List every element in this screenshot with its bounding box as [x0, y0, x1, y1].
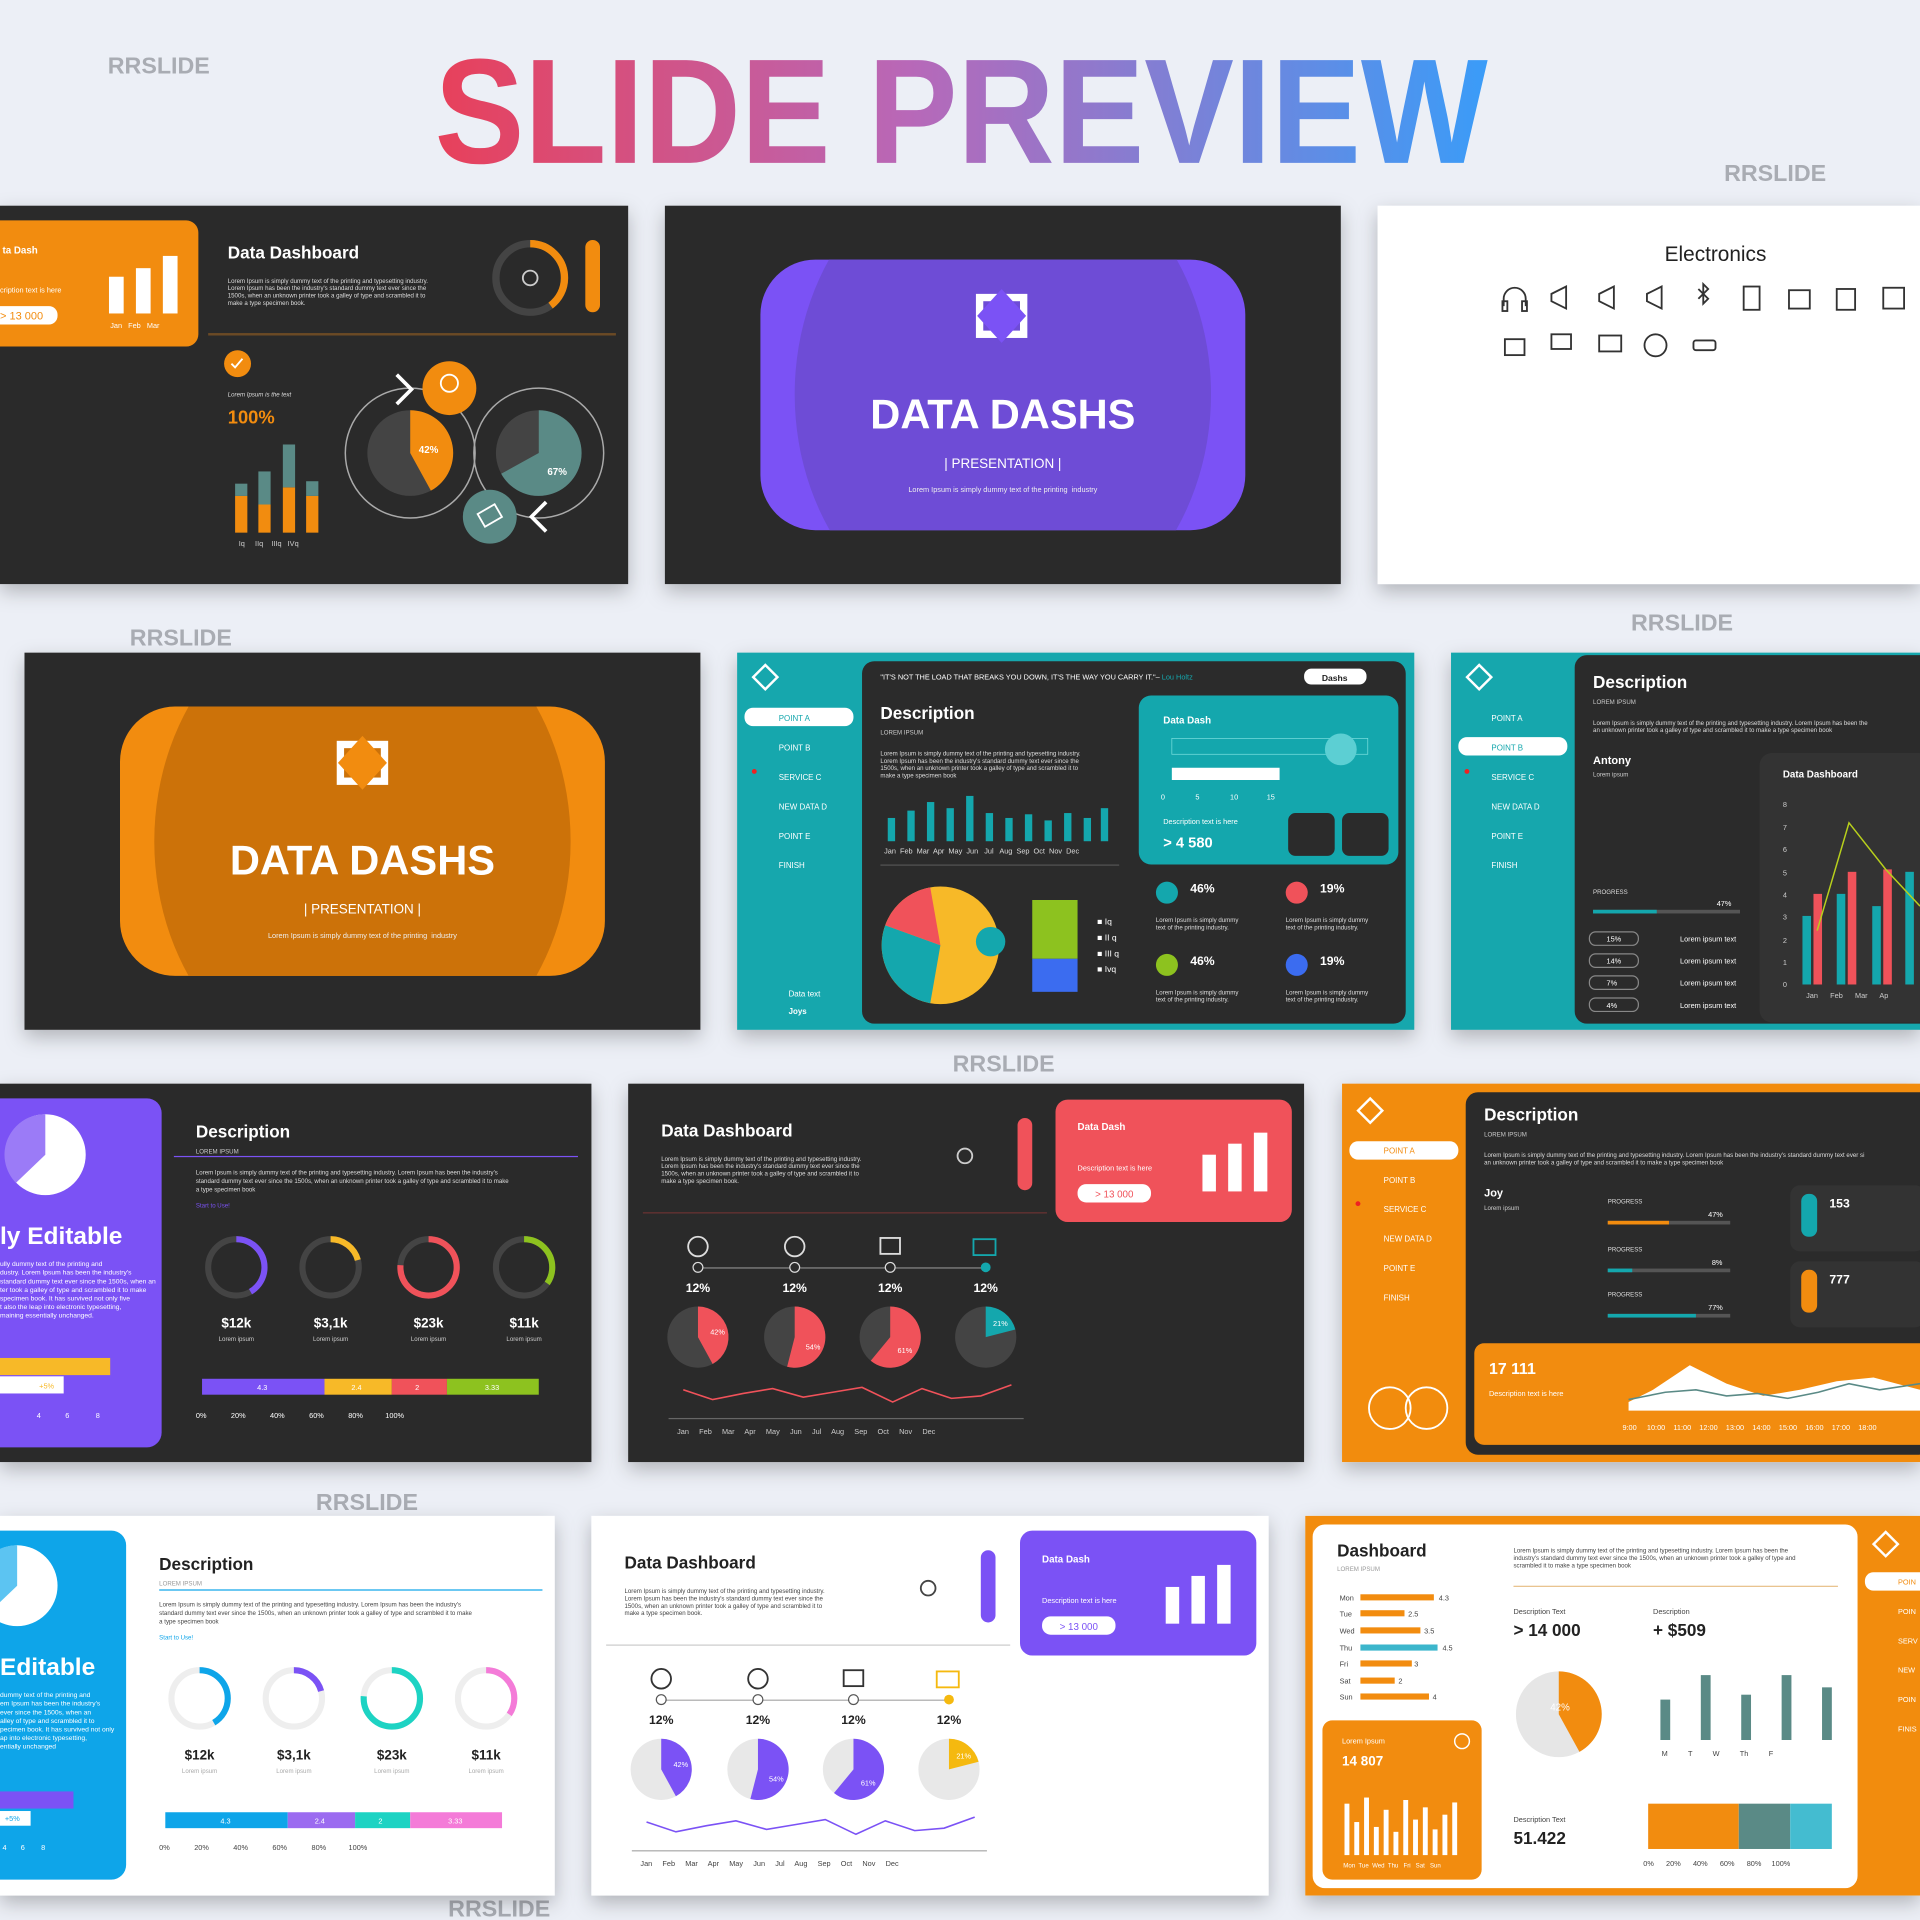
slide E: teal description dashboard: POINT B — [779, 744, 810, 753]
slide F: teal description chart: POINT A — [1491, 714, 1523, 723]
slide G: purple editable donuts: $3,1k — [314, 1315, 348, 1330]
slide H: data dashboard red: 12% — [973, 1281, 998, 1295]
slide H: data dashboard red: 12% — [686, 1281, 710, 1295]
slide G: purple editable donuts: 0% 20% 40% 60% 80% 100% — [196, 1411, 405, 1420]
slide E: teal description dashboard: Description text is here — [1163, 817, 1238, 826]
slide K: white data dashboard purple: 21% — [956, 1751, 971, 1760]
slide H: data dashboard red: 21% — [993, 1319, 1008, 1328]
slide A: data dashboard dark: Data Dashboard — [228, 242, 359, 262]
slide K: white data dashboard purple: Jan Feb Mar Apr May Jun Jul Aug Sep Oct Nov Dec — [640, 1859, 899, 1868]
slide F: teal description chart: 14% — [1607, 957, 1622, 966]
slide H: data dashboard red — [628, 1084, 1304, 1462]
slide I: orange description: 77% — [1708, 1303, 1723, 1312]
slide H: data dashboard red: 1500s, when an unknown printer took a galley of type and scrambled it to — [661, 1171, 859, 1178]
watermarks: RRSLIDE — [316, 1489, 418, 1515]
slide G: purple editable donuts: $23k — [414, 1315, 444, 1330]
slide G: purple editable donuts: dustry. Lorem Ipsum has been the industry's — [0, 1270, 132, 1277]
slide E: teal description dashboard: Lorem Ipsum is simply dummy text of the printing and typesetting industry. — [880, 751, 1081, 758]
slide F: teal description chart: 47% — [1717, 899, 1732, 908]
slide G: purple editable donuts: 4 6 8 — [37, 1411, 100, 1420]
slide L: orange dashboard: Thu — [1340, 1644, 1352, 1653]
slide C: electronics icons — [1378, 206, 1920, 584]
slide J: white blue editable: Description — [159, 1554, 253, 1574]
slide L: orange dashboard: > 14 000 — [1513, 1620, 1581, 1640]
slide H: data dashboard red: 12% — [782, 1281, 807, 1295]
slide B: purple title — [654, 202, 1352, 602]
slide F: teal description chart: 1 — [1783, 958, 1787, 967]
slide I: orange description: FINISH — [1384, 1293, 1410, 1302]
slide J: white blue editable: +5% — [5, 1814, 20, 1823]
slide G: purple editable donuts: LOREM IPSUM — [196, 1148, 239, 1155]
slide L: orange dashboard: 14 807 — [1342, 1754, 1383, 1769]
slide E: teal description dashboard: Description — [880, 703, 975, 723]
slide K: white data dashboard purple: 42% — [673, 1760, 689, 1769]
slide G: purple editable donuts: ter took a galley of type and scrambled it to make — [0, 1287, 147, 1294]
slide H: data dashboard red: 12% — [878, 1281, 903, 1295]
slide I: orange description: Joy — [1484, 1187, 1504, 1199]
slide J: white blue editable: Lorem ipsum — [468, 1768, 504, 1775]
slide J: white blue editable: $12k — [185, 1748, 215, 1763]
slide F: teal description chart: 15% — [1607, 935, 1622, 944]
slide G: purple editable donuts: Description — [196, 1122, 290, 1142]
slide L: orange dashboard: Wed — [1340, 1626, 1355, 1635]
slide I: orange description — [1342, 1084, 1920, 1462]
slide L: orange dashboard: Description Text — [1513, 1815, 1565, 1824]
slide L: orange dashboard: 3.5 — [1424, 1626, 1434, 1635]
slide I: orange description: NEW DATA D — [1384, 1235, 1432, 1244]
slide J: white blue editable: Lorem Ipsum is simply dummy text of the printing and typesetting industry. Lorem Ipsum has been the industry's — [159, 1602, 461, 1609]
watermarks: RRSLIDE — [1631, 610, 1733, 636]
slide L: orange dashboard: 51.422 — [1513, 1828, 1566, 1848]
slide H: data dashboard red: Description text is here — [1078, 1164, 1152, 1173]
slide L: orange dashboard: Mon — [1340, 1593, 1354, 1602]
slide L: orange dashboard: Tue — [1340, 1609, 1352, 1618]
slide F: teal description chart: LOREM IPSUM — [1593, 699, 1636, 706]
slide F: teal description chart: Jan Feb Mar Ap — [1806, 991, 1888, 1000]
slide K: white data dashboard purple: 54% — [769, 1775, 784, 1784]
slide J: white blue editable: 4 6 8 — [2, 1843, 45, 1852]
slide J: white blue editable: pecimen book. It has survived not only — [0, 1726, 115, 1733]
slide G: purple editable donuts: 4.3 — [257, 1383, 267, 1392]
slide D: orange title: DATA DASHS — [230, 836, 495, 883]
slide E: teal description dashboard: text of the printing industry. — [1286, 997, 1359, 1004]
slide E: teal description dashboard: FINISH — [779, 861, 805, 870]
slide L: orange dashboard: Sat — [1340, 1677, 1351, 1686]
slide J: white blue editable: Lorem ipsum — [276, 1768, 312, 1775]
slide F: teal description chart: 6 — [1783, 845, 1787, 854]
slide L: orange dashboard: 0% 20% 40% 60% 80% 100% — [1643, 1859, 1791, 1868]
slide L: orange dashboard: 42% — [1550, 1703, 1570, 1714]
slide H: data dashboard red: Data Dash — [1078, 1122, 1125, 1133]
slide K: white data dashboard purple: Lorem Ipsum is simply dummy text of the printing and typesetting industry. — [624, 1588, 825, 1595]
slide H: data dashboard red: 54% — [806, 1342, 821, 1351]
slide G: purple editable donuts: 2.4 — [351, 1383, 362, 1392]
slide I: orange description: Description text is here — [1489, 1389, 1564, 1398]
slide I: orange description: SERVICE C — [1384, 1205, 1427, 1214]
slide G: purple editable donuts: Lorem ipsum — [219, 1336, 254, 1343]
slide F: teal description chart: 7 — [1783, 823, 1787, 832]
slide I: orange description: POINT A — [1384, 1146, 1416, 1155]
slide L: orange dashboard: POIN — [1898, 1607, 1916, 1616]
slide E: teal description dashboard: ■ II q — [1097, 932, 1117, 942]
slide E: teal description dashboard: text of the printing industry. — [1286, 924, 1359, 931]
slide F: teal description chart: 2 — [1783, 936, 1787, 945]
slide A: data dashboard dark: Iq IIq IIIq IVq — [239, 539, 299, 548]
slide I: orange description: 777 — [1829, 1272, 1850, 1286]
slide K: white data dashboard purple: 12% — [937, 1713, 961, 1727]
slide E: teal description dashboard: text of the printing industry. — [1156, 924, 1229, 931]
slide A: data dashboard dark: make a type specimen book. — [228, 300, 306, 307]
slide F: teal description chart: 5 — [1783, 869, 1787, 878]
slide G: purple editable donuts: standard dummy text ever since the 1500s, when an — [0, 1278, 156, 1285]
slide F: teal description chart: Description — [1593, 672, 1687, 692]
slide L: orange dashboard: 2.5 — [1408, 1609, 1418, 1618]
slide I: orange description: an unknown printer took a galley of type and scrambled it to make a type specimen book — [1484, 1159, 1724, 1166]
slide E: teal description dashboard: Lorem Ipsum is simply dummy — [1286, 917, 1369, 924]
slide A: data dashboard dark: 67% — [547, 467, 567, 478]
slide L: orange dashboard: Description Text — [1513, 1607, 1565, 1616]
slide I: orange description: Lorem ipsum — [1484, 1205, 1519, 1212]
slide D: orange title — [14, 650, 711, 1048]
slide I: orange description: LOREM IPSUM — [1484, 1131, 1527, 1138]
slide E: teal description dashboard: Dashs — [1322, 673, 1348, 683]
slide E: teal description dashboard: Lorem Ipsum is simply dummy — [1156, 989, 1239, 996]
slide F: teal description chart: Lorem ipsum text — [1680, 935, 1736, 944]
slide I: orange description: 153 — [1829, 1196, 1850, 1210]
slide E: teal description dashboard: Lorem Ipsum is simply dummy — [1156, 917, 1239, 924]
slide E: teal description dashboard: ■ III q — [1097, 948, 1119, 958]
slide F: teal description chart: Lorem Ipsum is simply dummy text of the printing and typesetting industry. Lorem Ipsum has been the — [1593, 720, 1868, 727]
slide F: teal description chart: 0 — [1783, 980, 1787, 989]
slide J: white blue editable: entially unchanged — [0, 1744, 56, 1751]
slide J: white blue editable: em Ipsum has been the industry's — [0, 1701, 101, 1708]
slide E: teal description dashboard: Jan Feb Mar Apr May Jun Jul Aug Sep Oct Nov Dec — [884, 846, 1080, 855]
slide J: white blue editable: $23k — [377, 1748, 407, 1763]
slide A: data dashboard dark — [0, 206, 628, 584]
slide J: white blue editable: Lorem ipsum — [374, 1768, 409, 1775]
slide F: teal description chart: an unknown printer took a galley of type and scrambled it to make a type specimen book — [1593, 727, 1833, 734]
slide G: purple editable donuts: $12k — [221, 1315, 252, 1330]
slide E: teal description dashboard: SERVICE C — [779, 773, 822, 782]
slide K: white data dashboard purple: 12% — [841, 1713, 866, 1727]
slide I: orange description: 9:00 10:00 11:00 12:00 13:00 14:00 15:00 16:00 17:00 18:00 — [1622, 1423, 1877, 1432]
slide G: purple editable donuts: Lorem ipsum — [506, 1336, 542, 1343]
watermarks: RRSLIDE — [130, 624, 232, 650]
slide I: orange description: 47% — [1708, 1210, 1723, 1219]
slide I: orange description: PROGRESS — [1608, 1292, 1642, 1299]
slide E: teal description dashboard: 19% — [1320, 882, 1345, 896]
slide F: teal description chart: 4% — [1607, 1001, 1618, 1010]
watermarks: RRSLIDE — [1724, 160, 1826, 186]
slide G: purple editable donuts: Lorem ipsum — [313, 1336, 348, 1343]
slide L: orange dashboard: scrambled it to make a type specimen book — [1513, 1562, 1632, 1569]
slide E: teal description dashboard: 0 5 10 15 — [1161, 793, 1275, 802]
slide G: purple editable donuts: ly Editable — [0, 1223, 122, 1250]
slide A: data dashboard dark: cription text is here — [0, 286, 62, 295]
slide G: purple editable donuts: t also the leap into electronic typesetting, — [0, 1304, 122, 1311]
slide G: purple editable donuts: Start to Use! — [196, 1202, 230, 1209]
slide E: teal description dashboard: make a type specimen book — [880, 773, 957, 780]
slide I: orange description: PROGRESS — [1608, 1199, 1642, 1206]
slide L: orange dashboard — [1305, 1516, 1920, 1896]
slide G: purple editable donuts: ully dummy text of the printing and — [0, 1261, 103, 1268]
slide F: teal description chart: Lorem ipsum text — [1680, 957, 1736, 966]
slide E: teal description dashboard: POINT E — [779, 832, 810, 841]
slide L: orange dashboard: 3 — [1414, 1660, 1418, 1669]
slide E: teal description dashboard: Lorem Ipsum is simply dummy — [1286, 989, 1369, 996]
slide A: data dashboard dark: Lorem Ipsum is the text — [228, 392, 292, 399]
slide F: teal description chart: Antony — [1593, 755, 1632, 767]
slide A: data dashboard dark: > 13 000 — [0, 311, 43, 323]
slide K: white data dashboard purple: Lorem Ipsum has been the industry's standard dummy text ever since the — [624, 1595, 824, 1602]
slide K: white data dashboard purple: make a type specimen book. — [624, 1610, 703, 1617]
slide I: orange description: Lorem Ipsum is simply dummy text of the printing and typesetting industry. Lorem Ipsum has been the industry's standard dummy text ever si — [1484, 1152, 1864, 1159]
slide E: teal description dashboard: 46% — [1190, 954, 1215, 968]
slide B: purple title: DATA DASHS — [870, 391, 1135, 438]
slide E: teal description dashboard: POINT A — [779, 714, 811, 723]
slide J: white blue editable: Editable — [0, 1654, 95, 1681]
slide L: orange dashboard: FINIS — [1898, 1724, 1917, 1733]
slide K: white data dashboard purple — [591, 1516, 1269, 1896]
slide G: purple editable donuts: Lorem ipsum — [411, 1336, 446, 1343]
slide G: purple editable donuts: +5% — [39, 1382, 55, 1391]
slide A: data dashboard dark: 100% — [228, 407, 275, 428]
slide G: purple editable donuts: specimen book. It has survived not only five — [0, 1295, 130, 1302]
slide H: data dashboard red: 61% — [898, 1346, 913, 1355]
slide L: orange dashboard: POIN — [1898, 1577, 1916, 1586]
slide L: orange dashboard: Description — [1653, 1607, 1690, 1616]
slide L: orange dashboard: industry's standard dummy text ever since the 1500s, when an unknown printer took a galley of type and — [1513, 1555, 1796, 1562]
slide E: teal description dashboard: LOREM IPSUM — [880, 730, 923, 737]
slide J: white blue editable: $3,1k — [277, 1748, 311, 1763]
slide J: white blue editable: 2 — [378, 1816, 382, 1825]
slide J: white blue editable: 3.33 — [448, 1816, 462, 1825]
slide L: orange dashboard: M T W Th F — [1662, 1749, 1774, 1758]
slide I: orange description: 17 111 — [1489, 1361, 1536, 1378]
slide F: teal description chart: NEW DATA D — [1491, 802, 1540, 811]
slide A: data dashboard dark: Lorem Ipsum has been the industry's standard dummy text ever since the — [228, 285, 427, 292]
title: SLIDE PREVIEW — [435, 28, 1488, 195]
slide K: white data dashboard purple: Data Dash — [1042, 1554, 1090, 1565]
slide I: orange description: Description — [1484, 1104, 1578, 1124]
slide F: teal description chart: 8 — [1783, 800, 1787, 809]
slide E: teal description dashboard: ■ Iq — [1097, 916, 1112, 926]
slide J: white blue editable: 2.4 — [315, 1816, 325, 1825]
slide C: electronics icons: Electronics — [1665, 243, 1766, 266]
slide G: purple editable donuts: maining essentially unchanged. — [0, 1313, 94, 1320]
slide G: purple editable donuts: standard dummy text ever since the 1500s, when an unknown printer took a galley of type and scrambled it to make — [196, 1178, 509, 1185]
slide E: teal description dashboard: 19% — [1320, 954, 1345, 968]
slide E: teal description dashboard: text of the printing industry. — [1156, 997, 1229, 1004]
slide J: white blue editable: 4.3 — [220, 1816, 231, 1825]
slide L: orange dashboard: 4 — [1433, 1693, 1437, 1702]
slide H: data dashboard red: > 13 000 — [1095, 1190, 1134, 1201]
slide L: orange dashboard: 4.3 — [1439, 1593, 1449, 1602]
slide J: white blue editable — [0, 1516, 555, 1896]
slide L: orange dashboard: LOREM IPSUM — [1337, 1566, 1380, 1573]
slide G: purple editable donuts: $11k — [509, 1315, 539, 1330]
watermarks: RRSLIDE — [108, 52, 210, 78]
slide A: data dashboard dark: ta Dash — [2, 245, 38, 256]
slide E: teal description dashboard: Joys — [789, 1007, 807, 1016]
slide F: teal description chart — [1451, 653, 1920, 1030]
slide F: teal description chart: Lorem ipsum text — [1680, 979, 1736, 988]
slide J: white blue editable: ap into electronic typesetting, — [0, 1735, 87, 1742]
slide G: purple editable donuts: 2 — [415, 1383, 419, 1392]
slide K: white data dashboard purple: 1500s, when an unknown printer took a galley of type and scrambled it to — [624, 1603, 823, 1610]
slide A: data dashboard dark: Jan Feb Mar — [110, 321, 160, 330]
slide L: orange dashboard: Fri — [1340, 1660, 1349, 1669]
slide L: orange dashboard: 4.5 — [1442, 1644, 1453, 1653]
slide E: teal description dashboard: "IT'S NOT THE LOAD THAT BREAKS YOU DOWN, IT'S THE WAY YOU CARRY IT."– Lou Holtz — [880, 673, 1193, 682]
slide E: teal description dashboard: NEW DATA D — [779, 802, 827, 811]
slide I: orange description: POINT B — [1384, 1176, 1415, 1185]
slide F: teal description chart: PROGRESS — [1593, 889, 1628, 896]
slide H: data dashboard red: 42% — [710, 1328, 725, 1337]
slide F: teal description chart: 3 — [1783, 913, 1787, 922]
slide G: purple editable donuts: Lorem Ipsum is simply dummy text of the printing and typesetting industry. Lorem Ipsum has been the industry's — [196, 1169, 498, 1176]
slide L: orange dashboard: POIN — [1898, 1695, 1916, 1704]
slide B: purple title: | PRESENTATION | — [944, 456, 1061, 471]
slide G: purple editable donuts: 3.33 — [485, 1383, 499, 1392]
slide F: teal description chart: SERVICE C — [1491, 773, 1534, 782]
slide J: white blue editable: dummy text of the printing and — [0, 1692, 91, 1699]
slide L: orange dashboard: + $509 — [1653, 1620, 1706, 1640]
slide B: purple title: Lorem Ipsum is simply dummy text of the printing industry — [908, 485, 1098, 494]
slide L: orange dashboard: Mon Tue Wed Thu Fri Sat Sun — [1343, 1862, 1441, 1869]
slide A: data dashboard dark: Lorem Ipsum is simply dummy text of the printing and typesetting industry. — [228, 278, 428, 285]
slide E: teal description dashboard: Data Dash — [1163, 716, 1211, 727]
slide E: teal description dashboard: ■ Ivq — [1097, 964, 1116, 974]
slide L: orange dashboard: 2 — [1398, 1677, 1402, 1686]
slide K: white data dashboard purple: > 13 000 — [1060, 1622, 1099, 1633]
slide F: teal description chart: 7% — [1607, 979, 1618, 988]
slide J: white blue editable: LOREM IPSUM — [159, 1581, 202, 1588]
slide J: white blue editable: 0% 20% 40% 60% 80% 100% — [159, 1843, 368, 1852]
slide K: white data dashboard purple: Description text is here — [1042, 1596, 1117, 1605]
slide E: teal description dashboard: 46% — [1190, 882, 1215, 896]
slide E: teal description dashboard: > 4 580 — [1163, 835, 1213, 851]
slide J: white blue editable: ever since the 1500s, when an — [0, 1709, 91, 1716]
slide K: white data dashboard purple: 12% — [746, 1713, 770, 1727]
slide I: orange description: 8% — [1712, 1258, 1723, 1267]
slide I: orange description: POINT E — [1384, 1264, 1415, 1273]
slide J: white blue editable: standard dummy text ever since the 1500s, when an unknown printer took a galley of type and scrambled it to make — [159, 1610, 473, 1617]
slide F: teal description chart: Lorem ipsum text — [1680, 1001, 1736, 1010]
slide J: white blue editable: $11k — [472, 1748, 501, 1763]
slide G: purple editable donuts — [0, 1084, 591, 1462]
slide I: orange description: PROGRESS — [1608, 1246, 1642, 1253]
slide L: orange dashboard: Lorem Ipsum is simply dummy text of the printing and typesetting industry. Lorem Ipsum has been the — [1513, 1548, 1789, 1555]
slide J: white blue editable: Start to Use! — [159, 1635, 193, 1642]
slide L: orange dashboard: SERV — [1898, 1636, 1918, 1645]
slide H: data dashboard red: Jan Feb Mar Apr May Jun Jul Aug Sep Oct Nov Dec — [677, 1427, 936, 1436]
watermarks: RRSLIDE — [953, 1050, 1055, 1076]
slide J: white blue editable: alley of type and scrambled it to — [0, 1718, 95, 1725]
slide K: white data dashboard purple: Data Dashboard — [624, 1553, 756, 1573]
slide G: purple editable donuts: a type specimen book — [196, 1186, 256, 1193]
slide H: data dashboard red: make a type specimen book. — [661, 1178, 739, 1185]
slide F: teal description chart: POINT E — [1491, 832, 1523, 841]
slide K: white data dashboard purple: 61% — [861, 1778, 876, 1787]
slide A: data dashboard dark: 1500s, when an unknown printer took a galley of type and scrambled it to — [228, 293, 426, 300]
slide F: teal description chart: POINT B — [1491, 744, 1523, 753]
slide H: data dashboard red: Lorem Ipsum is simply dummy text of the printing and typesetting industry. — [661, 1156, 862, 1163]
slide L: orange dashboard: NEW — [1898, 1666, 1915, 1675]
slide L: orange dashboard: Dashboard — [1337, 1540, 1427, 1560]
slide E: teal description dashboard — [737, 653, 1414, 1030]
slide H: data dashboard red: Lorem Ipsum has been the industry's standard dummy text ever since the — [661, 1163, 860, 1170]
slide F: teal description chart: 4 — [1783, 891, 1787, 900]
slide H: data dashboard red: Data Dashboard — [661, 1120, 793, 1140]
slide D: orange title: | PRESENTATION | — [304, 901, 421, 916]
slide E: teal description dashboard: Lorem Ipsum has been the industry's standard dummy text ever since the — [880, 758, 1079, 765]
slide J: white blue editable: a type specimen book — [159, 1619, 220, 1626]
slide K: white data dashboard purple: 12% — [649, 1713, 674, 1727]
slide E: teal description dashboard: 1500s, when an unknown printer took a galley of type and scrambled it to — [880, 765, 1079, 772]
slide F: teal description chart: Data Dashboard — [1783, 770, 1858, 781]
slide J: white blue editable: Lorem ipsum — [182, 1768, 217, 1775]
slide L: orange dashboard: Sun — [1340, 1693, 1353, 1702]
slide E: teal description dashboard: Data text — [789, 990, 821, 999]
slide D: orange title: Lorem Ipsum is simply dummy text of the printing industry — [268, 931, 457, 940]
slide A: data dashboard dark: 42% — [419, 445, 439, 456]
slide F: teal description chart: FINISH — [1491, 861, 1518, 870]
slide L: orange dashboard: Lorem Ipsum — [1342, 1737, 1385, 1746]
slide F: teal description chart: Lorem ipsum — [1593, 771, 1628, 778]
